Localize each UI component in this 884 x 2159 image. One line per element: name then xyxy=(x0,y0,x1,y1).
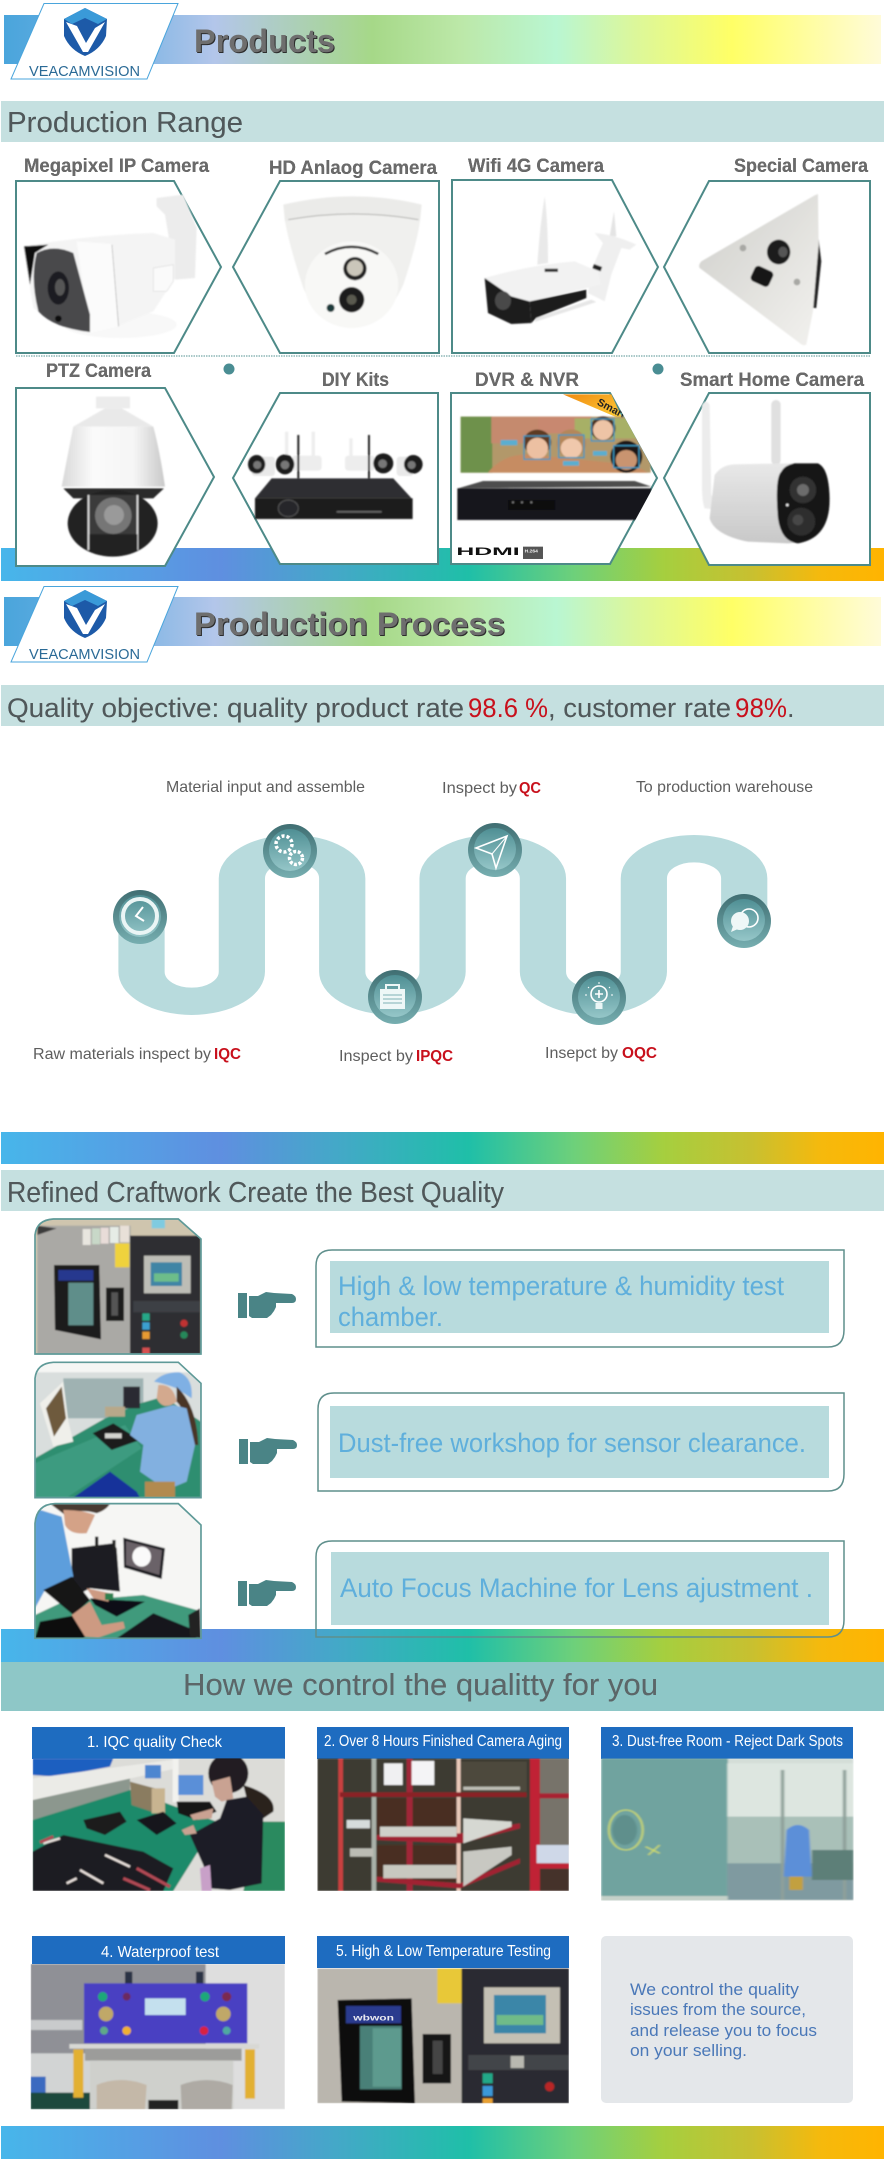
band: Refined Craftwork: Refined Craftwork Create the Best Quality xyxy=(7,1177,504,1209)
band: Quality objective: , customer rate xyxy=(548,693,731,723)
logo: Veacamvision: VEACAMVISION xyxy=(29,63,140,80)
callout: auto focus machine: Auto Focus Machine for Lens ajustment . xyxy=(340,1573,813,1603)
card 1: IQC quality check: 1. IQC quality Check xyxy=(87,1734,223,1751)
card 6: summary text: on your selling. xyxy=(630,2041,747,2060)
band: Production Range: Production Range xyxy=(7,107,243,139)
camera: wifi 4G bullet camera xyxy=(485,196,636,324)
label: Inspect by QC: Inspect by xyxy=(442,780,517,797)
band: Quality objective: 98% xyxy=(735,693,787,723)
photo: dust-free workshop xyxy=(35,1362,202,1498)
callout: dust-free workshop: Dust-free workshop for sensor clearance. xyxy=(338,1428,806,1458)
photo: auto focus machine xyxy=(35,1504,202,1638)
band: How we control the qualitty: How we control the qualitty for you xyxy=(183,1667,658,1702)
card 1: IQC quality check xyxy=(32,1727,285,1891)
rainbow divider 2 xyxy=(1,1132,884,1164)
icon: pointing hand 1 xyxy=(238,1292,296,1318)
door logo: wbwon xyxy=(352,2014,394,2023)
band: Refined Craftwork xyxy=(1,1170,884,1211)
banner: Smart corner: Smart xyxy=(595,396,628,421)
icon: clock xyxy=(113,890,167,944)
band: Quality objective: 98.6 % xyxy=(468,693,548,723)
decorative dot right xyxy=(652,364,664,374)
header gradient band xyxy=(4,597,881,646)
label: DVR & NVR: DVR & NVR xyxy=(475,370,579,391)
callout: test chamber: chamber. xyxy=(338,1302,443,1332)
camera: bullet IP camera xyxy=(23,195,197,338)
label: Wifi 4G Camera: Wifi 4G Camera xyxy=(468,156,604,177)
band: Production Range xyxy=(1,101,884,142)
camera: smart home battery camera xyxy=(702,400,830,543)
label: DIY Kits: DIY Kits xyxy=(322,370,389,391)
badge: H.264: H.264 xyxy=(525,548,538,554)
camera: PTZ speed dome xyxy=(62,397,165,557)
card 4: waterproof test: 4. Waterproof test xyxy=(101,1944,220,1961)
label: Inspect by IPQC xyxy=(339,1048,453,1065)
logo: Veacamvision xyxy=(11,586,178,663)
heading: Products: Products xyxy=(194,23,335,59)
camera: dome analog camera xyxy=(283,196,422,328)
label: Insepct by OQC xyxy=(545,1045,657,1062)
section header: Production Process xyxy=(4,586,881,663)
callout: dust-free workshop xyxy=(318,1393,844,1491)
decorative dot left xyxy=(224,364,234,374)
rainbow divider 1 xyxy=(1,548,884,581)
band: Quality objective: . xyxy=(787,693,795,723)
card 6: summary text: issues from the source, xyxy=(630,2000,806,2019)
card 2: finished camera aging xyxy=(317,1727,569,1891)
label: Raw materials inspect by IQC: Raw materials inspect by xyxy=(33,1046,211,1063)
camera: corner special camera xyxy=(699,194,821,345)
label: To production warehouse: To production warehouse xyxy=(636,779,813,796)
band: Quality objective xyxy=(1,685,884,726)
label: Insepct by OQC: Insepct by xyxy=(545,1045,618,1062)
label: Smart Home Camera: Smart Home Camera xyxy=(680,370,864,391)
band: How we control the qualitty xyxy=(1,1662,884,1711)
card 6: summary text xyxy=(601,1936,853,2103)
card 6: summary text: We control the quality xyxy=(630,1980,800,1999)
card 4: waterproof test xyxy=(31,1936,285,2109)
panel: DVR and NVR xyxy=(451,393,657,564)
panel: Special Camera xyxy=(664,181,870,353)
label: Material input and assemble: Material input and assemble xyxy=(166,779,365,796)
callout: test chamber: High & low temperature & humidity test xyxy=(338,1271,784,1301)
logo: HDMI: HDMI xyxy=(456,546,520,558)
icon: gears xyxy=(263,824,317,878)
craftwork photos xyxy=(35,1219,202,1638)
label: Insepct by OQC: OQC xyxy=(622,1045,657,1062)
photo: test chamber xyxy=(35,1219,202,1354)
card 2: finished camera aging: 2. Over 8 Hours Finished Camera Aging xyxy=(324,1733,562,1750)
label: Inspect by IPQC: Inspect by xyxy=(339,1048,413,1065)
product grid xyxy=(16,156,870,566)
label: Inspect by IPQC: IPQC xyxy=(416,1048,453,1065)
badge: H.264 xyxy=(523,547,543,559)
panel: Wifi 4G Camera xyxy=(452,180,658,353)
label: Special Camera: Special Camera xyxy=(734,156,868,177)
label: Raw materials inspect by IQC: IQC xyxy=(214,1046,241,1063)
label: HD Anlaog Camera: HD Anlaog Camera xyxy=(269,158,437,179)
section header: Products xyxy=(4,4,881,80)
label: PTZ Camera: PTZ Camera xyxy=(46,361,151,382)
logo: Veacamvision: VEACAMVISION xyxy=(29,646,140,663)
card 3: dust-free room xyxy=(601,1727,854,1901)
dotted divider xyxy=(16,355,870,357)
panel: Smart Home Camera xyxy=(664,393,870,565)
card 5: high and low temperature testing xyxy=(317,1936,569,2103)
label: Megapixel IP Camera: Megapixel IP Camera xyxy=(24,156,209,177)
header gradient band xyxy=(4,15,881,64)
card 3: dust-free room: 3. Dust-free Room - Reject Dark Spots xyxy=(612,1733,843,1750)
panel: DIY Kits xyxy=(233,393,438,564)
icon: light bulb xyxy=(572,971,626,1025)
icon: pointing hand 3 xyxy=(238,1580,296,1606)
callout: test chamber xyxy=(316,1250,844,1347)
band: Quality objective: Quality objective: quality product rate xyxy=(7,693,464,723)
icon: chat bubbles xyxy=(717,894,771,948)
logo: Veacamvision xyxy=(11,4,178,80)
product: DIY NVR kit xyxy=(248,432,423,519)
serpentine path xyxy=(142,849,744,1001)
panel: HD Analog Camera xyxy=(233,181,439,353)
banner: Smart corner xyxy=(563,394,624,418)
icon: paper plane xyxy=(468,823,522,877)
panel: PTZ Camera xyxy=(16,388,214,566)
process flow diagram xyxy=(33,779,813,1065)
rainbow divider 3 xyxy=(1,1629,884,1662)
icon: pointing hand 2 xyxy=(239,1438,297,1464)
card 5: high and low temperature testing: 5. High & Low Temperature Testing xyxy=(336,1943,551,1960)
panel: Megapixel IP Camera xyxy=(16,181,221,353)
callout: auto focus machine xyxy=(316,1541,844,1637)
card 6: summary text: and release you to focus xyxy=(630,2021,817,2040)
icon: briefcase xyxy=(368,970,422,1024)
label: Inspect by QC: QC xyxy=(519,780,541,797)
product: DVR and NVR recorder xyxy=(456,394,651,559)
heading: Production Process: Production Process xyxy=(194,606,505,642)
rainbow divider 4 xyxy=(1,2126,884,2159)
